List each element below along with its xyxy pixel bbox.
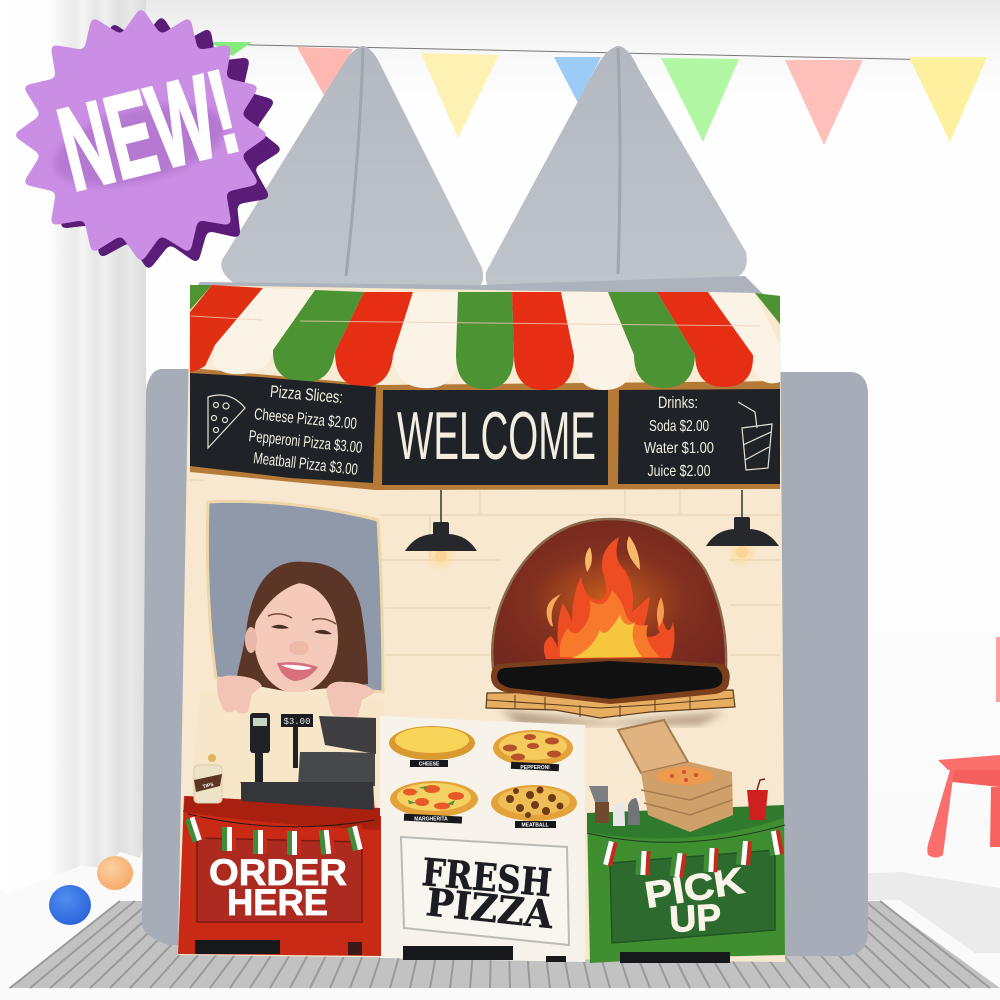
left hand (217, 676, 262, 714)
cash register: $3.00 (283, 717, 311, 727)
service window (207, 501, 383, 693)
cash register (241, 713, 376, 810)
side cushions (142, 369, 868, 956)
here text: HERE (227, 882, 328, 923)
oven shadow (500, 710, 725, 725)
cream scallop backing (190, 345, 780, 384)
pepperoni pizza (493, 730, 573, 771)
face (254, 583, 338, 693)
left triangular cushion (221, 46, 483, 289)
order text: ORDER (209, 852, 347, 893)
left chalkboard menu (190, 373, 376, 483)
small pizza (656, 767, 714, 785)
monitor (319, 716, 376, 754)
brown sign band (190, 368, 780, 490)
pizza slices heading: Pizza Slices: (269, 382, 344, 407)
green counter bunting (587, 825, 785, 878)
register body (298, 752, 375, 786)
cheese pizza price: Cheese Pizza $2.00 (253, 406, 358, 433)
icon: left hanging lamp (405, 490, 477, 572)
orange ball (97, 856, 133, 890)
margherita label: MARGHERITA (414, 816, 448, 822)
blue ball (49, 885, 91, 925)
right chalkboard menu (618, 389, 780, 484)
meatball pizza (491, 785, 577, 828)
fringe (254, 566, 352, 625)
open lid (618, 720, 688, 773)
fluffy white rug (868, 872, 1000, 953)
right triangular cushion (486, 46, 747, 290)
soda price: Soda $2.00 (649, 418, 709, 435)
utensil cup (589, 786, 609, 823)
badge dark shadow star (20, 8, 290, 278)
juice price: Juice $2.00 (648, 463, 711, 480)
drinks heading: Drinks: (658, 393, 698, 412)
brick ledge (486, 690, 735, 718)
beige wall (178, 285, 785, 962)
nose (289, 641, 309, 655)
register base (241, 782, 374, 810)
pick text: PICK (642, 860, 747, 916)
smile (277, 662, 318, 681)
right hand (326, 682, 376, 718)
cheese label: CHEESE (419, 762, 440, 768)
pepper shaker (628, 798, 640, 825)
oven dome (492, 519, 726, 668)
pink chair (927, 637, 1000, 858)
cheese pizza (389, 726, 475, 768)
hair (236, 562, 368, 692)
red counter bunting (185, 814, 375, 855)
order here counter (178, 713, 381, 956)
badge text shadow (46, 89, 234, 201)
grey floor rug (8, 901, 1000, 988)
pizza: PIZZA (424, 879, 556, 937)
curtain (0, 0, 146, 894)
meatball label: MEATBALL (521, 822, 549, 828)
icon: right hanging lamp (706, 490, 779, 568)
center chalkboard (382, 390, 608, 485)
fabric flap under window (190, 692, 384, 800)
flames (544, 536, 675, 659)
icon: drink cup (738, 402, 772, 470)
tips label: TIPS (202, 782, 215, 790)
card terminal (250, 713, 270, 753)
pick up counter (587, 720, 785, 963)
top bunting (210, 42, 987, 145)
box stack (641, 762, 733, 832)
new text: NEW! (47, 46, 250, 216)
floor (0, 843, 1000, 1000)
pepperoni label: PEPPERONI (520, 765, 550, 771)
meatball pizza price: Meatball Pizza $3.00 (252, 450, 359, 479)
pizza oven (486, 519, 735, 725)
back top cushion (190, 276, 765, 296)
red soda cup (747, 779, 768, 820)
salt shaker (613, 802, 625, 826)
fresh pizza sign frame (401, 837, 569, 945)
pizza boxes (618, 720, 733, 832)
welcome text: WELCOME (397, 398, 596, 474)
margherita pizza (390, 781, 478, 824)
up text: UP (668, 896, 722, 940)
new badge (13, 7, 290, 278)
fresh pizza text (420, 849, 556, 937)
badge purple star (13, 7, 269, 263)
icon: pizza slice (208, 395, 245, 448)
eyes (268, 614, 336, 634)
ear (245, 627, 257, 653)
brick lines (190, 480, 780, 655)
awning (190, 285, 780, 490)
tips jar (194, 754, 222, 803)
pepperoni pizza price: Pepperoni Pizza $3.00 (248, 428, 363, 457)
oven mouth (491, 656, 730, 704)
fresh: FRESH (420, 849, 554, 905)
water price: Water $1.00 (644, 440, 714, 457)
price display (281, 714, 313, 727)
fabric storefront (178, 285, 785, 963)
pizza menu panel (380, 716, 585, 962)
